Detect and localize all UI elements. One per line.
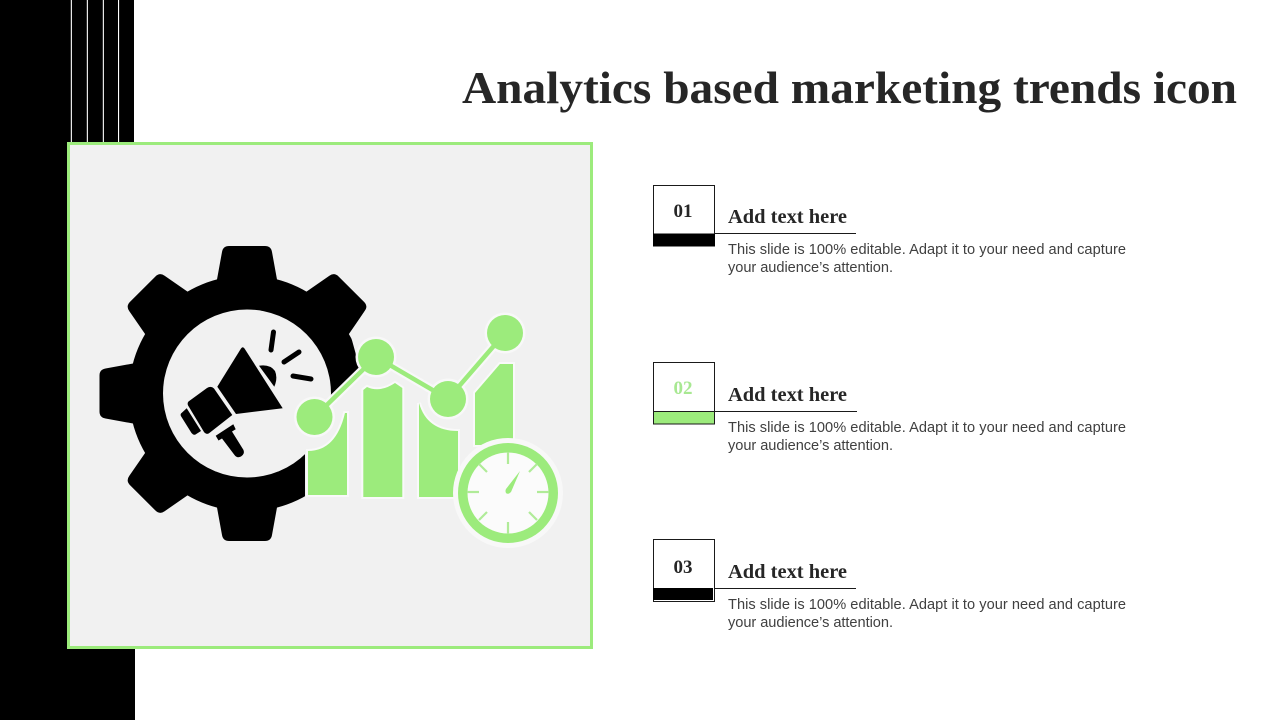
icon: analytics marketing: [100, 246, 563, 548]
body text 02: [728, 420, 1126, 454]
item 01: [653, 186, 1126, 276]
body text 01: This slide is 100% editable. Adapt it to your need and capture: [728, 242, 1126, 258]
number box 03: 03: [674, 557, 692, 578]
heading 01: Add text here: [728, 206, 847, 228]
heading 02: Add text here: [728, 384, 847, 406]
title: Analytics based marketing trends icon: [462, 62, 1237, 113]
icon: megaphone: [181, 332, 311, 457]
item 02: [653, 362, 1126, 454]
number box 03: [653, 540, 714, 602]
number box 01: 01: [674, 201, 692, 222]
body text 01: your audience’s attention.: [728, 260, 893, 276]
bar chart: [308, 364, 513, 497]
body text 03: This slide is 100% editable. Adapt it to your need and capture: [728, 597, 1126, 613]
number box 02: 02: [674, 378, 692, 399]
left black striped band: [0, 0, 135, 720]
panel: icon background: [68, 144, 592, 648]
body text 03: your audience’s attention.: [728, 615, 893, 631]
heading 03: Add text here: [728, 561, 847, 583]
body text 02: your audience’s attention.: [728, 438, 893, 454]
body text 03: [728, 597, 1126, 631]
body text 02: This slide is 100% editable. Adapt it to your need and capture: [728, 420, 1126, 436]
number box 02: [653, 362, 715, 424]
trend line: [294, 312, 526, 438]
item 03: [653, 540, 1126, 631]
number box 01: [653, 186, 715, 246]
icon: gear: [100, 246, 420, 541]
icon: stopwatch clock: [453, 438, 563, 548]
body text 01: [728, 242, 1126, 276]
